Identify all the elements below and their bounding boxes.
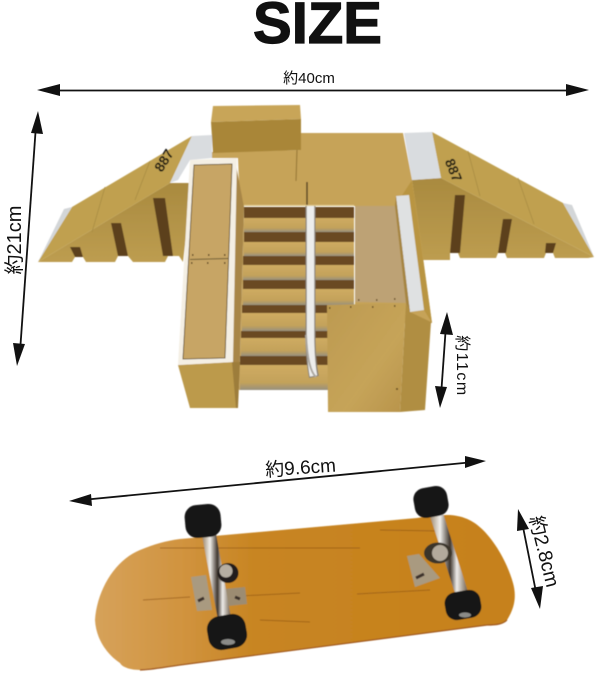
ramp seams [92, 161, 150, 232]
label: overall depth: 約21cm [3, 206, 26, 274]
right ramp [404, 132, 594, 260]
left grind box [178, 158, 240, 408]
left ramp [38, 135, 212, 262]
grind box seam [190, 258, 228, 260]
arrow: skateboard width [517, 509, 543, 609]
ramp silver top [404, 132, 441, 180]
top wheel [184, 503, 222, 539]
grind box upper face [355, 206, 406, 303]
ramp logo: 887 [151, 146, 177, 174]
platform stair lip [244, 204, 354, 206]
skate ramp set [38, 105, 594, 412]
ramp surface [432, 132, 594, 257]
stair side wall [232, 165, 244, 390]
kingpin [218, 563, 238, 583]
top wheel [412, 484, 450, 520]
arrow: overall depth [13, 111, 43, 366]
top box [211, 105, 301, 153]
grind box white frame [178, 158, 237, 365]
handrail [306, 206, 316, 377]
skateboard [95, 484, 515, 670]
deck edge [140, 620, 507, 670]
label: overall width: 約40cm [283, 70, 335, 87]
baseplate [191, 575, 212, 611]
rear truck [184, 503, 249, 652]
stairs [239, 207, 354, 390]
label: skateboard length: 約9.6cm [265, 455, 337, 481]
ramp silver tip [38, 207, 72, 262]
platform groove [306, 182, 308, 205]
ramp surface [38, 136, 192, 262]
axle [428, 507, 468, 596]
top platform [212, 133, 432, 323]
bottom wheel [205, 612, 249, 652]
stair base [239, 207, 354, 390]
grind box front block [327, 303, 406, 412]
grind box base [178, 362, 238, 408]
grind box top [183, 164, 232, 359]
baseplate [407, 554, 440, 587]
ramp side face [38, 183, 192, 262]
grind box block side [400, 303, 431, 412]
grind box side [395, 196, 410, 312]
platform deck [212, 133, 432, 323]
arrow: overall width [37, 84, 589, 96]
grind box rivets [191, 255, 226, 263]
grind box silver strip [396, 195, 424, 312]
box top [211, 105, 301, 122]
ramp silver top [170, 135, 212, 183]
right grind box [327, 180, 432, 412]
ramp side face [412, 178, 594, 260]
bottom wheel [443, 588, 483, 622]
deck [95, 515, 515, 670]
label: ramp height: 約11cm [453, 335, 471, 397]
stair risers [240, 207, 354, 365]
ramp notches [450, 195, 556, 253]
ramp silver tip [563, 203, 594, 257]
stair treads [240, 218, 354, 390]
label: skateboard width: 約2.8cm [524, 514, 563, 589]
grind box rivets [329, 299, 398, 389]
deck grain [143, 530, 440, 622]
arrow: skateboard length [69, 456, 486, 506]
kingpin [424, 542, 452, 564]
platform seam [296, 150, 297, 181]
ramp logo: 887 [442, 156, 466, 184]
axle [201, 528, 231, 620]
front truck [407, 484, 483, 622]
arrow: ramp height [435, 312, 453, 408]
ramp notches [70, 198, 173, 257]
ramp seams [468, 151, 534, 224]
box front [211, 119, 301, 153]
